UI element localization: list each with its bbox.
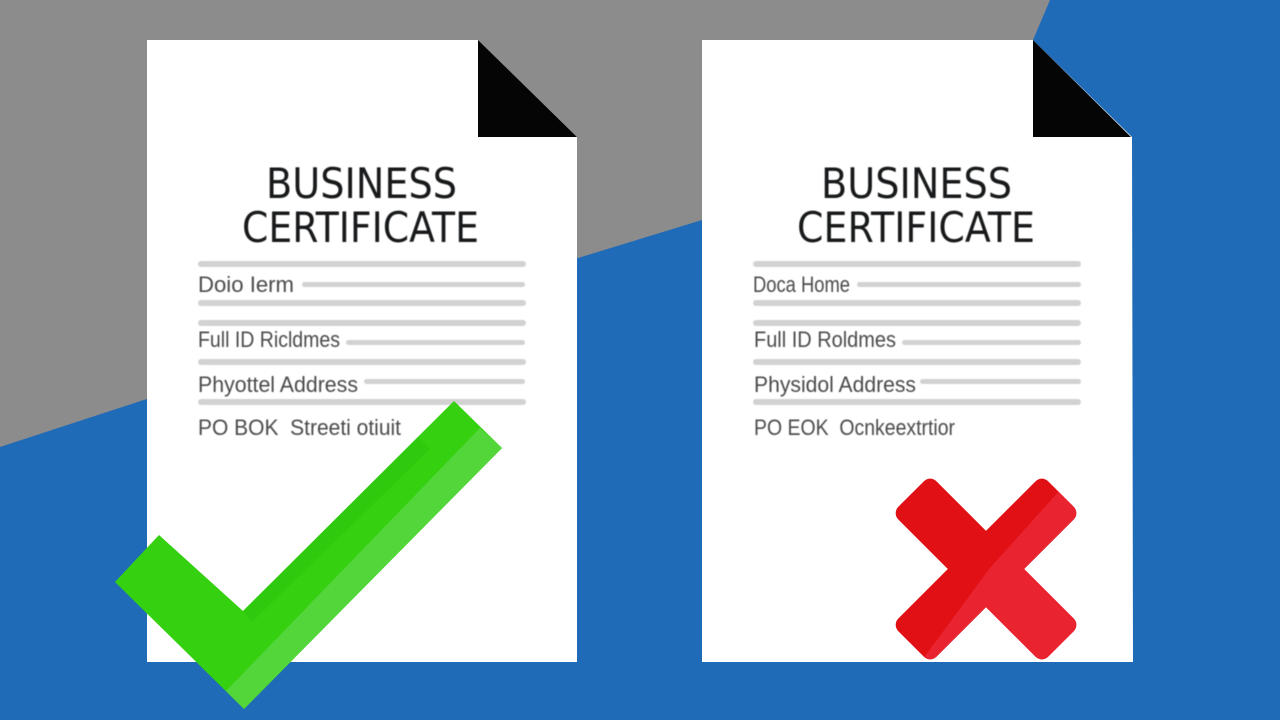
folded corner	[478, 40, 577, 137]
form field labels: Full ID Ricldmes	[198, 327, 340, 352]
background: grey diagonal area	[0, 0, 1050, 447]
form field labels: PO BOK Streeti otiuit	[198, 415, 401, 440]
document sheet	[702, 40, 1133, 662]
heading: CERTIFICATE	[242, 203, 479, 252]
document sheet	[147, 40, 577, 662]
form rule lines	[753, 261, 1081, 405]
form field labels: Full ID Roldmes	[754, 327, 896, 352]
form field labels: PO EOK Ocnkeextrtior	[754, 415, 955, 440]
heading: BUSINESS	[266, 159, 457, 208]
heading	[242, 159, 479, 252]
heading	[797, 159, 1035, 252]
form field labels: Phyottel Address	[198, 372, 358, 397]
form field labels	[198, 272, 401, 440]
panel: valid business certificate document	[147, 40, 577, 662]
icon: green check mark	[115, 401, 502, 709]
form field labels: Physidol Address	[754, 372, 916, 397]
form rule lines	[198, 261, 526, 405]
heading: BUSINESS	[821, 159, 1012, 208]
form field labels	[753, 272, 955, 440]
folded corner	[1033, 40, 1131, 137]
panel: invalid business certificate document	[702, 40, 1133, 662]
icon: red cross mark	[892, 475, 1080, 663]
form field labels: Doca Home	[753, 272, 850, 297]
form field labels: Doio Ierm	[198, 272, 294, 297]
heading: CERTIFICATE	[797, 203, 1035, 252]
